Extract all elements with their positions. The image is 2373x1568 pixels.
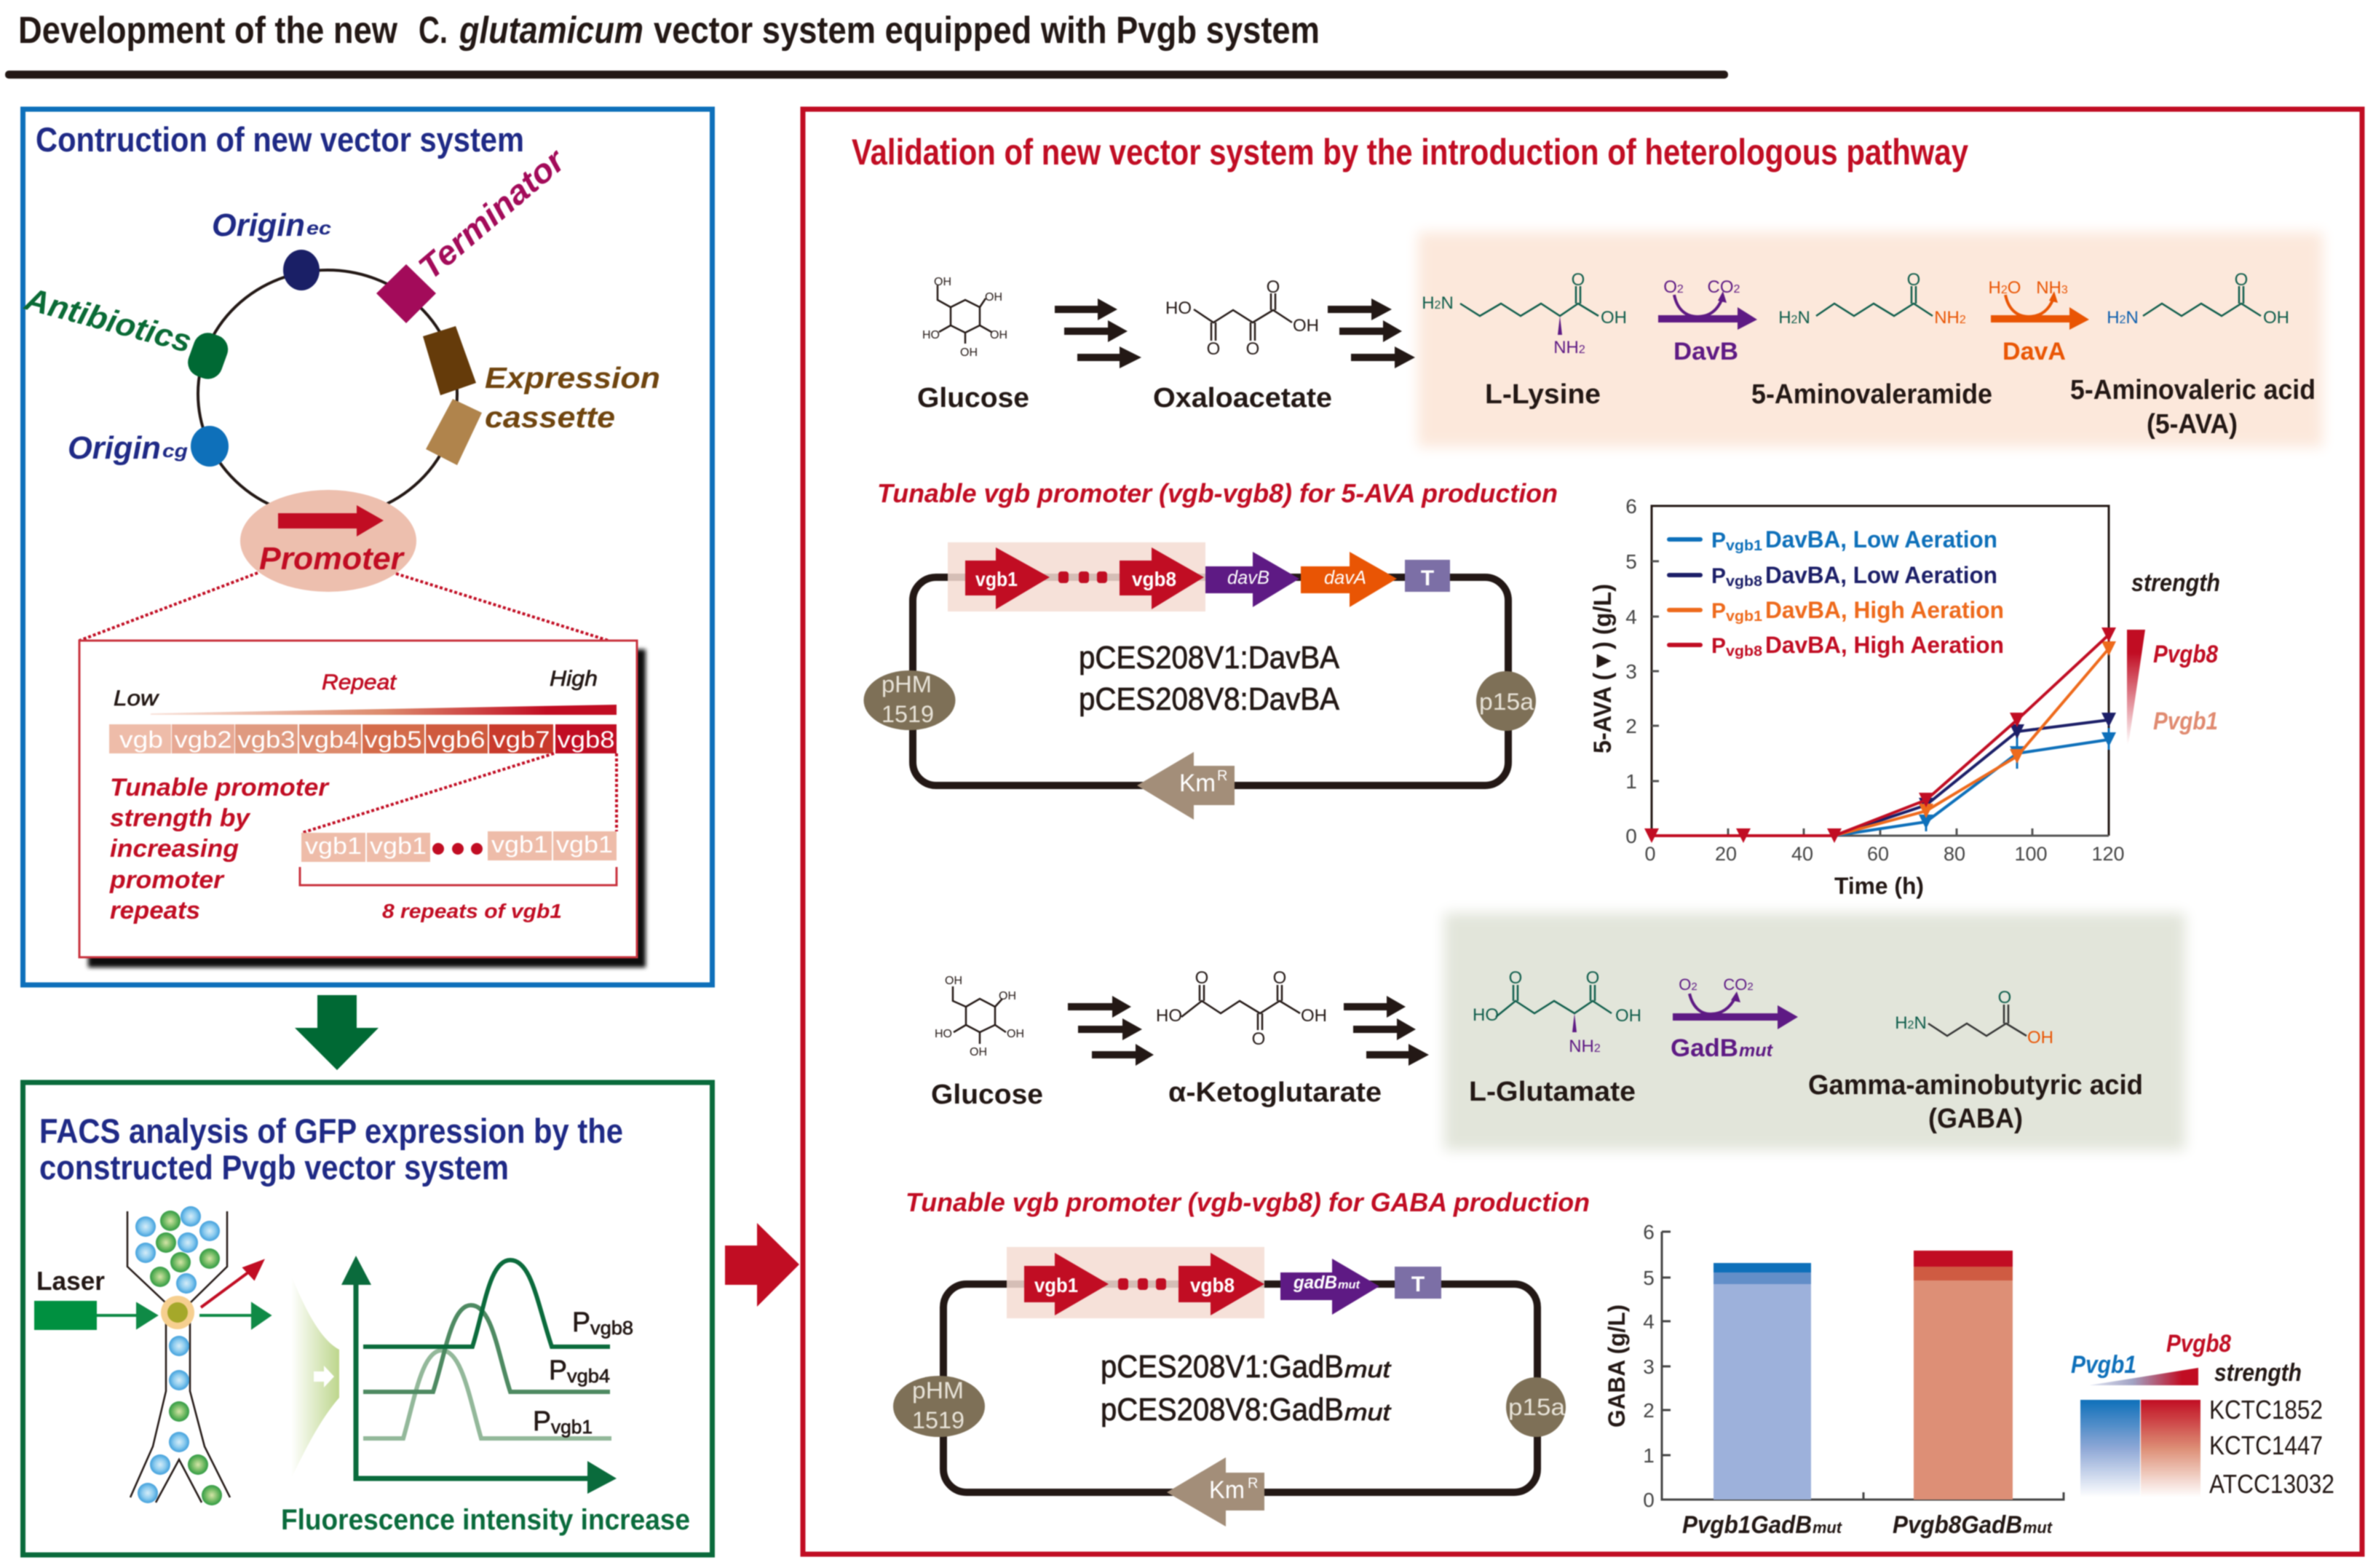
chart axes (1652, 506, 2109, 836)
arrow: DavA reaction (1989, 278, 2089, 365)
curve label Pvgb4: vgb4 (567, 1365, 610, 1387)
title: C. (419, 9, 448, 52)
structure: GABA: H2N (1895, 1013, 1927, 1033)
chart legend (1667, 526, 2004, 660)
plasmid names (1101, 1349, 1391, 1428)
y axis title: GABA (g/L) (1604, 1304, 1630, 1428)
origin ec marker: Origin (212, 207, 305, 243)
structure: alpha-ketoglutarate: OH (1301, 1006, 1327, 1026)
structure: 5-aminovaleric acid: H2N (2107, 308, 2139, 328)
y tick labels (1625, 495, 1637, 847)
scale labels: High (550, 667, 598, 691)
curve label Pvgb1: vgb1 (551, 1416, 593, 1438)
repeat series boxes: vgb2 (175, 726, 231, 753)
vgb1 repeat boxes: vgb1 (370, 833, 427, 859)
vgb1 repeat boxes: vgb1 (491, 831, 548, 858)
pHM1519 origin: pHM (912, 1377, 964, 1403)
y tick labels: 6 (1625, 495, 1637, 518)
y tick labels: 1 (1625, 770, 1637, 793)
structure: L-lysine: H2N (1422, 293, 1454, 313)
structure: glucose bottom: OH (999, 990, 1016, 1002)
structure: oxaloacetate: OH (1293, 316, 1319, 336)
repeat series boxes: vgb4 (301, 726, 358, 753)
plasmid diagram: DavBA (863, 542, 1536, 820)
structure: glucose bottom: OH (1007, 1028, 1024, 1040)
series: Pvgb8 high aeration (1644, 627, 2116, 843)
panel: validation (803, 109, 2362, 1554)
terminator block (1395, 1267, 1441, 1299)
structure: L-lysine (1422, 270, 1627, 357)
arrow: DavA reaction: NH3 (2036, 278, 2068, 298)
x tick labels: 40 (1791, 843, 1813, 865)
label: glucose bottom: Glucose (931, 1080, 1043, 1110)
x axis title: Time (h) (1834, 873, 1924, 899)
y tick labels: 0 (1625, 825, 1637, 847)
label: GABA: (GABA) (1928, 1104, 2023, 1134)
structure: glucose bottom: HO (935, 1028, 952, 1040)
origin cg marker (68, 426, 229, 467)
x tick labels: 20 (1715, 843, 1737, 865)
y tick labels: 3 (1625, 660, 1637, 683)
repeat dots (1058, 571, 1107, 583)
chart legend: DavBA, High Aeration (1765, 632, 2004, 658)
davA arrow (1301, 552, 1397, 607)
origin cg marker: Origin (68, 430, 161, 466)
KmR arrow: Km (1179, 769, 1216, 797)
label: GABA (1808, 1070, 2143, 1134)
chart legend: DavBA, High Aeration (1765, 597, 2004, 623)
terminator marker: Terminator (411, 140, 573, 287)
bar legend: KCTC1447 (2209, 1430, 2323, 1460)
plasmid names: mut (1344, 1356, 1391, 1382)
plasmid map (20, 140, 660, 592)
structure: alpha-ketoglutarate: O (1273, 968, 1286, 988)
label: 5-aminovaleramide: 5-Aminovaleramide (1751, 379, 1992, 410)
structure: 5-aminovaleric acid: O (2235, 270, 2248, 290)
davB arrow: davB (1227, 566, 1269, 588)
promoter strength key (2127, 569, 2220, 745)
chart legend: P (1711, 599, 1726, 623)
promoter detail box (79, 641, 646, 967)
line chart: 5-AVA (1589, 495, 2220, 899)
y tick labels (1643, 1221, 1655, 1511)
structure: GABA: O (1998, 988, 2011, 1007)
KmR arrow (1137, 752, 1235, 820)
arrows: oxaloacetate to lysine (1328, 298, 1415, 368)
heading: FACS: FACS analysis of GFP expression by the (39, 1112, 623, 1150)
arrow: scatter (201, 1262, 262, 1307)
label: alpha-ketoglutarate: α-Ketoglutarate (1168, 1077, 1382, 1108)
chart legend: DavBA, Low Aeration (1765, 562, 1997, 588)
arrow: to validation panel (725, 1223, 799, 1307)
bar: Pvgb1 GadB (1714, 1263, 1811, 1500)
antibiotics marker: Antibiotics (20, 281, 195, 360)
structure: glucose bottom (935, 975, 1024, 1058)
curve label Pvgb1 (533, 1406, 593, 1438)
laser interrogation spot (161, 1296, 194, 1329)
label: L-glutamate: L-Glutamate (1469, 1077, 1636, 1107)
fluorescence axis label: Fluorescence intensity increase (281, 1504, 690, 1536)
p15a origin (1506, 1377, 1566, 1437)
arrow: gradient chevron (291, 1275, 339, 1478)
arrows: glucose to oxaloacetate (1055, 298, 1141, 368)
label: 5-aminovaleric acid: 5-Aminovaleric acid (2070, 375, 2315, 405)
structure: glucose top: OH (990, 329, 1007, 341)
structure: oxaloacetate: O (1267, 277, 1280, 297)
y tick labels: 5 (1625, 550, 1637, 573)
chart legend: vgb1 (1726, 609, 1762, 625)
structure: oxaloacetate (1165, 277, 1319, 359)
arrow: GadB reaction: CO2 (1723, 975, 1754, 994)
label: glucose top: Glucose (917, 383, 1029, 413)
tunable promoter text: increasing (110, 835, 239, 863)
promoter strength key: Pvgb8 (2153, 641, 2218, 668)
davA arrow: davA (1324, 566, 1366, 588)
arrow: laser beam out (199, 1304, 269, 1327)
y tick labels: 0 (1643, 1489, 1655, 1511)
curve label Pvgb1: P (533, 1406, 551, 1437)
pHM1519 origin (893, 1376, 985, 1437)
bar: Pvgb8 GadB (1914, 1251, 2013, 1500)
bar legend: ATCC13032 (2209, 1469, 2334, 1499)
KmR arrow (1167, 1457, 1264, 1527)
expression cassette: cassette (485, 400, 615, 434)
bracket (300, 867, 617, 885)
pHM1519 origin: pHM (882, 671, 932, 697)
terminator block (1405, 560, 1450, 592)
plasmid names: pCES208V1:DavBA (1079, 640, 1340, 676)
x tick labels: 120 (2091, 843, 2125, 865)
scale labels: Low (114, 686, 160, 710)
plasmid diagram: GadB (893, 1247, 1566, 1527)
pHM1519 origin (863, 670, 955, 730)
y tick labels: 4 (1625, 606, 1637, 628)
arrow: DavB reaction: CO2 (1708, 277, 1740, 297)
gadB arrow: gadB (1293, 1272, 1337, 1293)
y tick labels: 1 (1643, 1444, 1655, 1467)
arrows: ketoglutarate to glutamate (1344, 996, 1429, 1066)
structure: L-lysine: O (1572, 270, 1585, 290)
structure: glucose bottom: OH (970, 1046, 987, 1058)
tunable promoter text: strength by (110, 804, 251, 832)
curve label Pvgb8: vgb8 (590, 1317, 633, 1339)
chart legend: P (1711, 528, 1726, 553)
promoter strength key: strength (2131, 569, 2220, 597)
x tick labels: 0 (1644, 843, 1656, 865)
curve label Pvgb8 (572, 1307, 633, 1339)
terminator block: T (1421, 566, 1434, 590)
title: Development of the new (18, 9, 397, 52)
vgb1 arrow: vgb1 (1034, 1274, 1078, 1296)
vgb1 arrow (1024, 1253, 1109, 1315)
chart legend: vgb8 (1726, 574, 1762, 590)
arrow: laser beam in (97, 1304, 156, 1327)
bar axes (1662, 1232, 2064, 1500)
x tick labels (1644, 843, 2125, 865)
plasmid names: pCES208V1:GadB (1101, 1349, 1344, 1385)
terminator block: T (1411, 1272, 1425, 1296)
structure: oxaloacetate: O (1246, 339, 1259, 359)
promoter strength key: Pvgb1 (2153, 708, 2218, 735)
x tick labels: 100 (2014, 843, 2048, 865)
origin ec marker: ec (306, 217, 332, 239)
5-AVA pathway background (1418, 232, 2323, 447)
vgb1 arrow (965, 547, 1050, 609)
tunable promoter text: Tunable promoter (110, 774, 330, 801)
heading: FACS: constructed Pvgb vector system (39, 1148, 509, 1187)
arrow: GadB reaction: GadB (1671, 1034, 1738, 1062)
subheading: GABA promoter: Tunable vgb promoter (vgb-vgb8) for GABA production (906, 1187, 1590, 1217)
structure: 5-aminovaleramide: NH2 (1934, 308, 1966, 328)
gadB arrow (1280, 1259, 1379, 1315)
strength wedge (151, 705, 617, 715)
bar legend: Pvgb8 (2166, 1330, 2231, 1358)
p15a origin: p15a (1479, 689, 1534, 715)
repeat series boxes (109, 724, 617, 753)
arrow: DavB reaction (1658, 277, 1757, 365)
zoom lines to vgb1 repeats (302, 753, 617, 833)
structure: GABA: OH (2027, 1028, 2053, 1048)
chart legend: P (1711, 564, 1726, 588)
structure: oxaloacetate: O (1207, 339, 1220, 359)
y tick labels: 4 (1643, 1310, 1655, 1333)
y tick labels: 6 (1643, 1221, 1655, 1243)
structure: L-glutamate (1473, 968, 1641, 1056)
series: Pvgb1 high aeration (1834, 641, 2116, 836)
repeat dots (1118, 1278, 1166, 1290)
structure: L-glutamate: HO (1473, 1005, 1499, 1025)
origin ec marker (212, 207, 332, 290)
scale labels: Repeat (322, 670, 397, 694)
davB arrow (1205, 552, 1299, 607)
zoom lines (79, 573, 609, 641)
promoter marker: Promoter (259, 541, 405, 577)
vgb8 arrow: vgb8 (1190, 1274, 1235, 1296)
structure: 5-aminovaleramide: H2N (1778, 308, 1810, 328)
structure: L-glutamate: O (1509, 968, 1522, 988)
tunable promoter text: promoter (109, 866, 225, 894)
KmR arrow: Km (1209, 1476, 1245, 1504)
structure: alpha-ketoglutarate: O (1252, 1029, 1265, 1049)
bar legend: strength (2214, 1359, 2302, 1387)
y axis title: 5-AVA (▼) (g/L) (1589, 584, 1617, 753)
p15a origin (1476, 671, 1536, 731)
repeat series boxes: vgb5 (364, 726, 422, 753)
plasmid names: mut (1344, 1399, 1391, 1425)
expression cassette (423, 326, 660, 465)
laser source: Laser (36, 1266, 105, 1296)
repeat series boxes: vgb8 (558, 726, 614, 753)
structure: 5-aminovaleramide (1778, 270, 1966, 328)
structure: glucose top: OH (960, 347, 978, 359)
x tick labels: 80 (1944, 843, 1965, 865)
vgb1 repeat boxes: vgb1 (305, 833, 362, 859)
x label: Pvgb8GadBmut: mut (2023, 1518, 2053, 1537)
heading: construction: Contruction of new vector system (36, 120, 524, 159)
y tick labels: 5 (1643, 1267, 1655, 1289)
series: Pvgb8 low aeration (1834, 713, 2116, 836)
plasmid names: pCES208V8:GadB (1101, 1392, 1344, 1428)
repeat series boxes: vgb3 (237, 726, 296, 753)
structure: alpha-ketoglutarate: HO (1156, 1006, 1182, 1026)
expression cassette: Expression (485, 361, 660, 395)
bar chart: GABA (1604, 1221, 2334, 1539)
vgb8 arrow (1178, 1253, 1264, 1315)
title underline (5, 71, 1728, 79)
promoter marker (240, 490, 416, 592)
label: oxaloacetate: Oxaloacetate (1153, 383, 1332, 413)
title: vector system equipped with Pvgb system (654, 9, 1320, 52)
structure: glucose top: OH (985, 291, 1002, 304)
arrow: GadB reaction: mut (1739, 1041, 1773, 1061)
structure: L-lysine: OH (1601, 308, 1627, 328)
scale labels (114, 667, 598, 710)
antibiotics marker (20, 281, 232, 383)
structure: 5-aminovaleric acid (2107, 270, 2289, 328)
x label: Pvgb8GadBmut: Pvgb8GadB (1893, 1511, 2022, 1539)
chart legend: vgb8 (1726, 644, 1762, 660)
chart legend: vgb1 (1726, 538, 1762, 554)
y tick labels: 2 (1643, 1399, 1655, 1422)
tunable promoter text (109, 774, 330, 924)
arrow: DavA reaction: DavA (2002, 338, 2066, 365)
x tick labels: 60 (1867, 843, 1889, 865)
arrow: DavA reaction: H2O (1989, 278, 2021, 298)
vgb1 arrow: vgb1 (975, 568, 1018, 590)
chart legend: DavBA, Low Aeration (1765, 526, 1997, 553)
arrows: glucose to ketoglutarate (1068, 996, 1154, 1066)
structure: alpha-ketoglutarate: O (1195, 968, 1208, 988)
plasmid names (1079, 640, 1340, 717)
vgb1 repeat boxes (301, 831, 617, 862)
structure: L-lysine: NH2 (1553, 338, 1585, 357)
cells (135, 1206, 222, 1505)
arrow: DavB reaction: O2 (1663, 277, 1684, 297)
label: 5-aminovaleric acid (2070, 375, 2315, 440)
structure: 5-aminovaleramide: O (1907, 270, 1920, 290)
structure: alpha-ketoglutarate (1156, 968, 1327, 1049)
curve label Pvgb4: P (549, 1355, 567, 1386)
structure: glucose top: OH (934, 276, 951, 288)
terminator marker (376, 140, 573, 323)
vgb1 repeat boxes: vgb1 (556, 831, 613, 858)
KmR arrow: R (1248, 1476, 1258, 1492)
heading: FACS (39, 1112, 623, 1187)
bar legend: Pvgb1 (2071, 1351, 2136, 1379)
GABA pathway background (1444, 913, 2185, 1150)
arrow: GadB reaction (1671, 975, 1798, 1062)
arrow: GadB reaction: O2 (1679, 975, 1697, 994)
repeat series boxes: vgb (119, 726, 163, 753)
structure: 5-aminovaleric acid: OH (2263, 308, 2289, 328)
p15a origin: p15a (1508, 1394, 1565, 1420)
repeat series boxes: vgb7 (492, 726, 550, 753)
structure: glucose bottom: OH (945, 975, 962, 987)
structure: GABA (1895, 988, 2053, 1048)
promoter highlight (1007, 1247, 1264, 1318)
x label: Pvgb1GadBmut: mut (1813, 1518, 1843, 1537)
label: 5-aminovaleric acid: (5-AVA) (2147, 409, 2238, 440)
vgb8 arrow: vgb8 (1132, 568, 1176, 590)
arrow: DavB reaction: DavB (1673, 338, 1738, 365)
title: glutamicum (459, 9, 643, 52)
label: L-lysine: L-Lysine (1485, 379, 1601, 410)
structure: L-glutamate: OH (1615, 1006, 1641, 1026)
arrow: down to FACS panel (295, 995, 379, 1070)
curve label Pvgb4 (549, 1355, 610, 1387)
KmR arrow: R (1217, 768, 1227, 784)
pHM1519 origin: 1519 (882, 701, 934, 727)
structure: glucose top: HO (922, 329, 940, 341)
series: Pvgb1 low aeration (1834, 728, 2116, 836)
bar legend (2071, 1330, 2334, 1499)
title (18, 9, 1320, 52)
bar legend: KCTC1852 (2209, 1395, 2323, 1425)
panel: construction of new vector system (20, 109, 712, 985)
chart legend: P (1711, 634, 1726, 658)
y tick labels: 3 (1643, 1355, 1655, 1378)
structure: oxaloacetate: HO (1165, 298, 1192, 318)
structure: glucose top (922, 276, 1007, 359)
origin cg marker: cg (162, 440, 188, 462)
promoter highlight (948, 542, 1205, 611)
heading: validation: Validation of new vector system by the introduction of heterologous pathway (852, 132, 1968, 173)
vgb8 arrow (1120, 547, 1204, 609)
panel: FACS analysis (23, 1082, 712, 1555)
flow cell channel (127, 1211, 230, 1502)
y tick labels: 2 (1625, 715, 1637, 737)
curve label Pvgb8: P (572, 1307, 590, 1338)
subheading: 5-AVA promoter: Tunable vgb promoter (vgb-vgb8) for 5-AVA production (877, 478, 1558, 508)
fluorescence histogram (341, 1256, 633, 1494)
plasmid names: pCES208V8:DavBA (1079, 681, 1340, 717)
pHM1519 origin: 1519 (912, 1407, 964, 1433)
label: GABA: Gamma-aminobutyric acid (1808, 1070, 2143, 1101)
structure: L-glutamate: NH2 (1569, 1037, 1601, 1056)
gadB arrow: mut (1338, 1279, 1360, 1291)
tunable promoter text: repeats (110, 897, 200, 924)
structure: L-glutamate: O (1586, 968, 1599, 988)
repeat series boxes: vgb6 (428, 726, 485, 753)
x label: Pvgb1GadBmut: Pvgb1GadB (1682, 1511, 1812, 1539)
bracket label: 8 repeats of vgb1 (382, 900, 562, 922)
laser source (34, 1266, 105, 1330)
